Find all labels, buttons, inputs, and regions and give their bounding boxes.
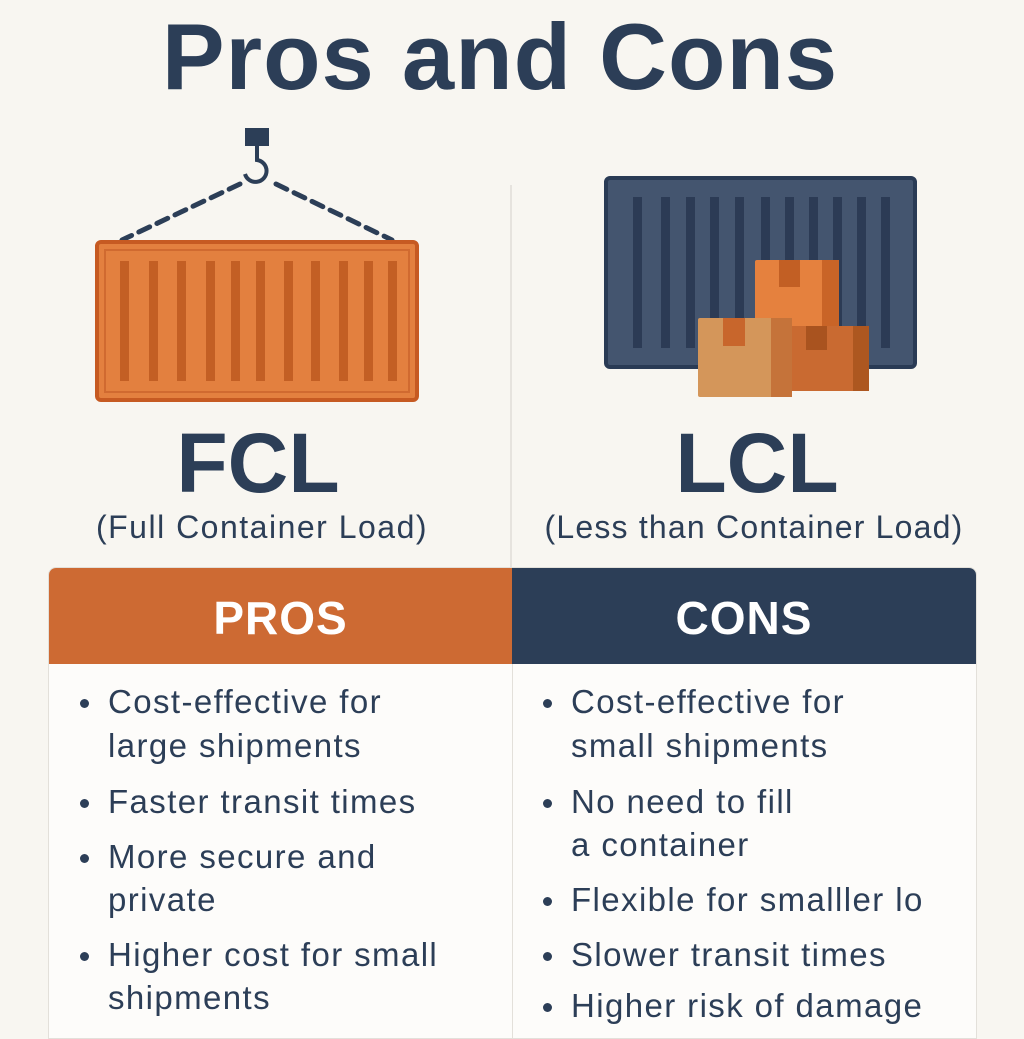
list: pros: private [108, 881, 217, 918]
list: cons: small shipments [571, 727, 829, 764]
title: Pros and Cons [162, 4, 838, 109]
header: CONS: CONS [676, 592, 812, 644]
list: pros: More secure and [108, 838, 377, 875]
list: cons: Flexible for smalller lo [571, 881, 924, 918]
subheading: FCL: (Full Container Load) [96, 509, 428, 545]
list: pros [80, 683, 438, 1016]
header: PROS [49, 568, 512, 664]
list: cons: Cost-effective for [571, 683, 845, 720]
list: pros: Faster transit times [108, 783, 417, 820]
icon: FCL container on hook [95, 128, 419, 402]
list: pros: Cost-effective for [108, 683, 382, 720]
icon: LCL container with boxes [604, 176, 917, 397]
list: pros: Higher cost for small [108, 936, 438, 973]
list: cons: a container [571, 826, 750, 863]
list: pros: large shipments [108, 727, 362, 764]
heading: FCL: FCL [176, 416, 340, 510]
header: PROS: PROS [213, 592, 348, 644]
list: cons: Slower transit times [571, 936, 887, 973]
list: cons: No need to fill [571, 783, 794, 820]
list: cons [543, 683, 924, 1024]
header: CONS [512, 568, 976, 664]
list: pros: shipments [108, 979, 271, 1016]
list: cons: Higher risk of damage [571, 987, 923, 1024]
subheading: LCL: (Less than Container Load) [544, 509, 964, 545]
panel: table [48, 567, 977, 1039]
heading: LCL: LCL [675, 416, 839, 510]
